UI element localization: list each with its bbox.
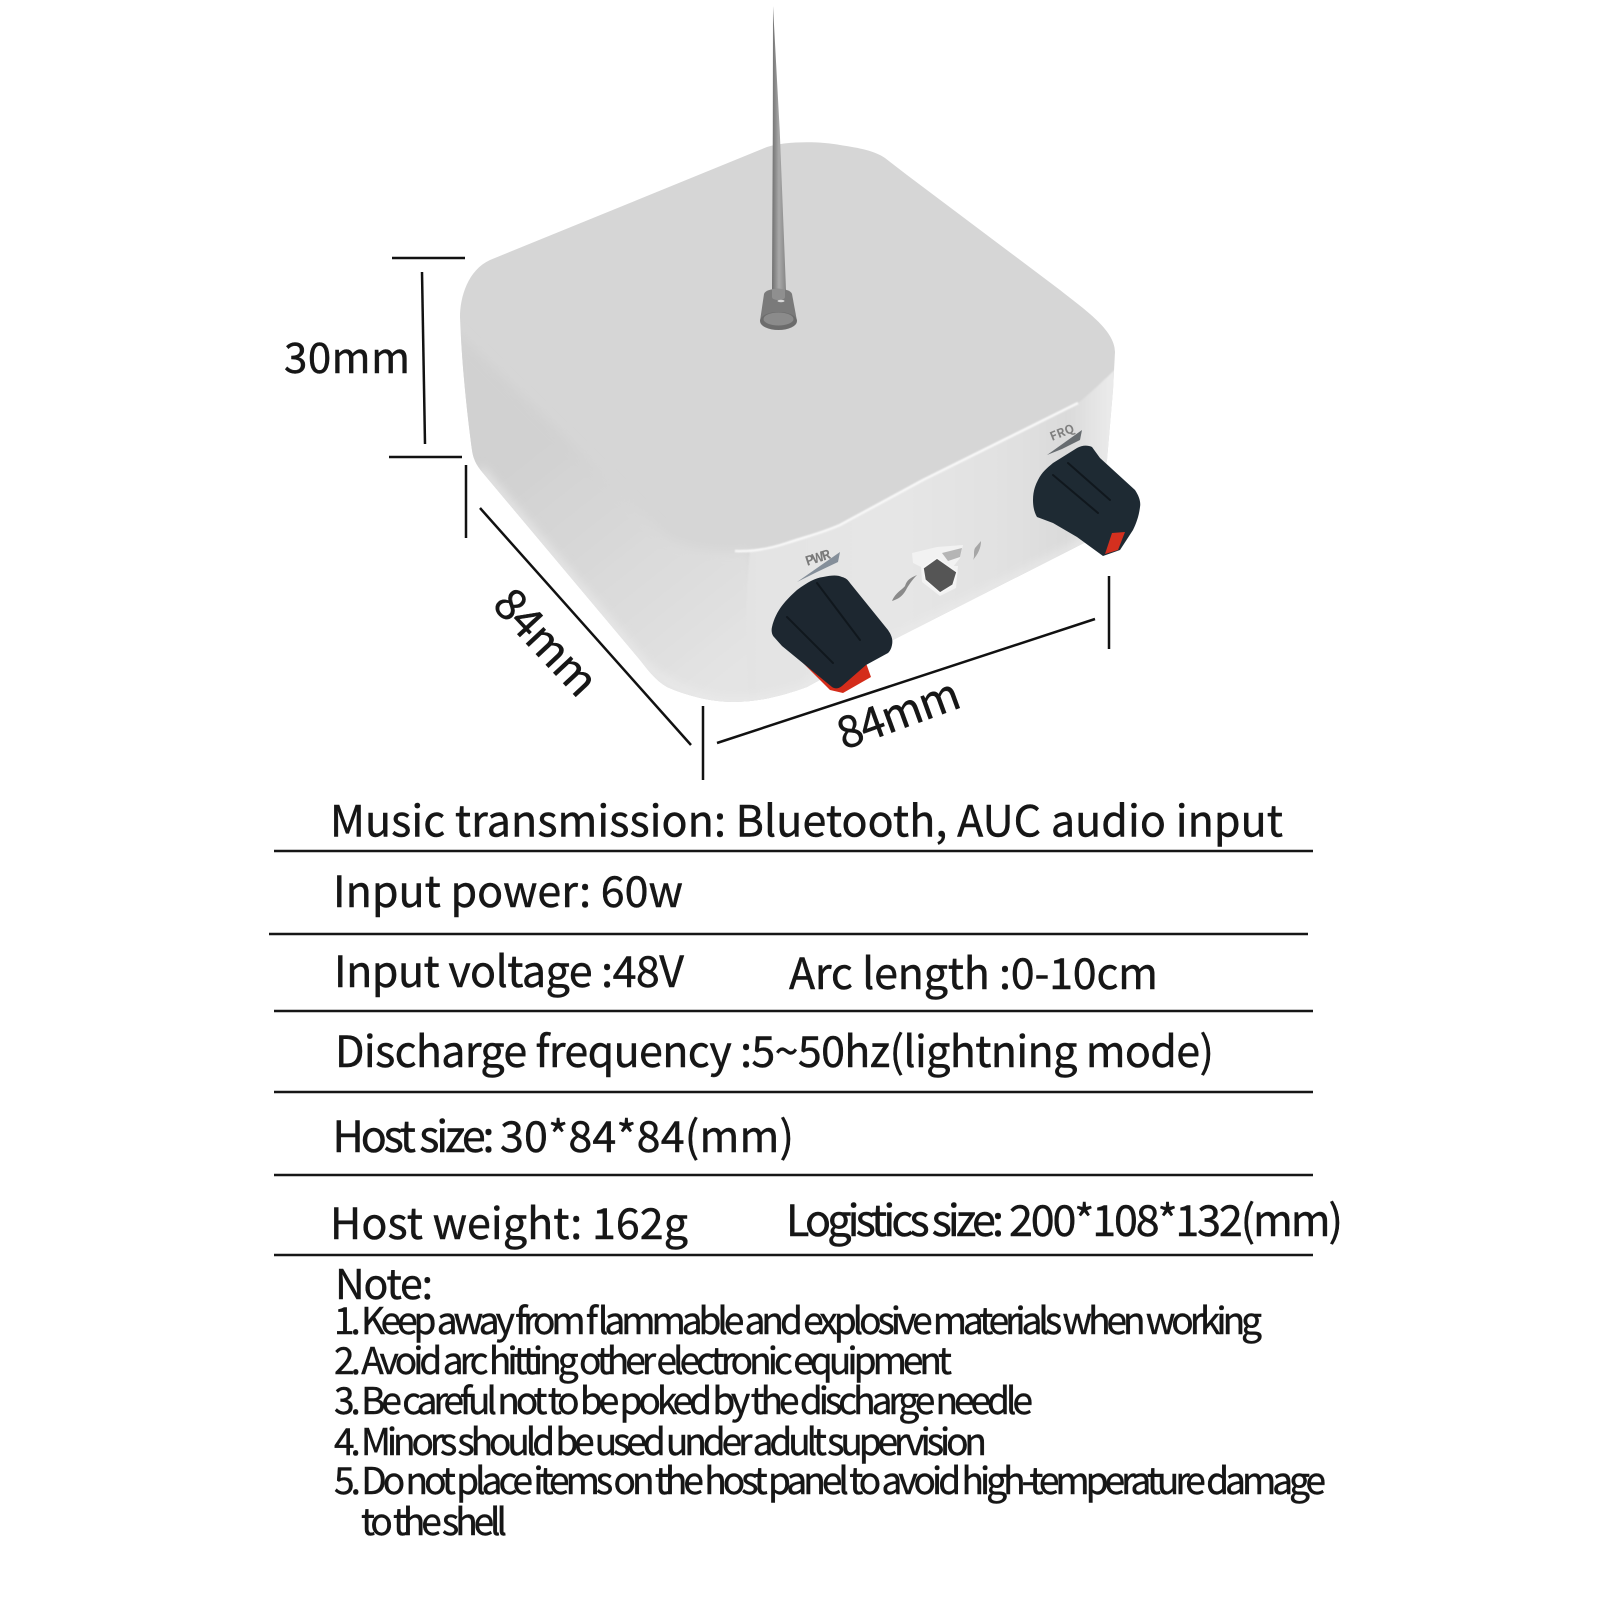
note heading: Note: [335,1251,433,1311]
PWR knob [772,576,892,693]
note 3: 3. Be careful not to be poked by the discharge needle [334,1371,1033,1425]
note 4: 4. Minors should be used under adult supervision [334,1412,987,1466]
device body [440,130,1130,720]
FRQ label: FRQ [1047,420,1077,445]
spec: host size: Host size: [332,1103,494,1165]
notes block [334,1251,1326,1546]
switch [892,541,981,601]
PWR label [797,544,840,582]
product illustration: tesla coil speaker [440,6,1140,720]
needle collar [760,289,797,330]
specification table [269,788,1343,1255]
dimension lines [389,258,1109,780]
spec: input power: Input power: 60w [333,858,683,920]
spec: arc length: Arc length :0-10cm [789,940,1158,1002]
FRQ knob [1033,446,1140,556]
spec: host size: 30*84*84(mm) [500,1103,794,1165]
note 1: 1. Keep away from flammable and explosive materials when working [334,1291,1262,1345]
FRQ label [1047,420,1082,455]
dimension label: width 84mm: 84mm [827,659,968,762]
table rules [269,851,1313,1255]
discharge needle [772,6,786,290]
PWR label: PWR [802,544,833,570]
dimension label: height 30mm: 30mm [284,325,410,386]
note 5: 5. Do not place items on the host panel to avoid high-temperature damage [334,1451,1326,1505]
spec: logistics size: Logistics size: [786,1187,1004,1249]
spec: logistics size: 200*108*132(mm) [1009,1187,1343,1249]
note 2: 2. Avoid arc hitting other electronic equipment [334,1331,952,1385]
note 5 continuation: to the shell [361,1492,507,1546]
spec: discharge frequency: Discharge frequency :5~50hz(lightning mode) [335,1018,1214,1080]
spec: host weight: Host weight: 162g [330,1190,688,1252]
spec: input voltage: Input voltage :48V [334,938,684,1000]
spec: music transmission: Music transmission: Bluetooth, AUC audio input [330,788,1283,850]
dimension label: depth 84mm: 84mm [481,571,616,708]
